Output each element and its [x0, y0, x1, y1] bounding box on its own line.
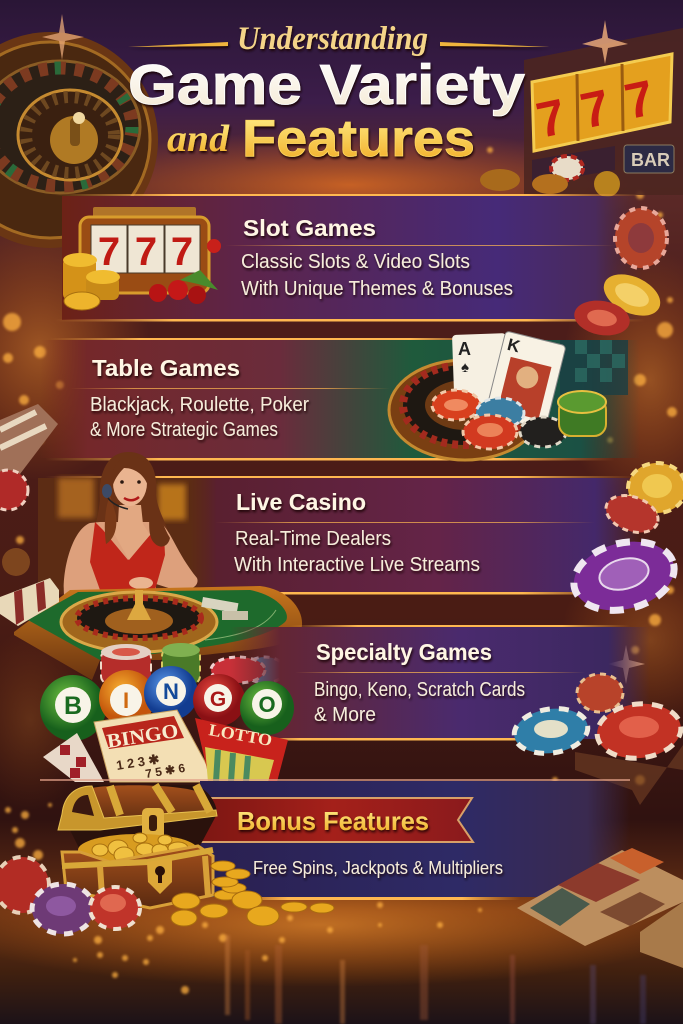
- heading: Specialty Games: [316, 639, 492, 665]
- icon: chips right lower: [511, 674, 683, 805]
- icon: chip stacks: [101, 643, 285, 684]
- title: Game Variety: [128, 53, 525, 117]
- icon: roulette, cards and chips: A: [458, 339, 471, 359]
- text block: With Interactive Live Streams: [234, 554, 480, 576]
- text block: Bingo, Keno, Scratch Cards: [314, 679, 525, 701]
- icon: bingo balls: N: [163, 679, 179, 704]
- icon: bingo balls: B: [64, 692, 82, 720]
- icon: slot machine top right: [480, 28, 683, 197]
- icon: roulette wheel top left: [0, 32, 158, 248]
- icon: dice card: [43, 733, 104, 782]
- heading ribbon: [192, 798, 473, 842]
- icon: slot machine 777: 7: [98, 230, 120, 274]
- icon: roulette, cards and chips: ♠: [461, 359, 469, 376]
- icon: checkered mat: [517, 848, 683, 968]
- text block: & More Strategic Games: [90, 419, 278, 441]
- panel: specialty games: [230, 625, 650, 740]
- heading: Table Games: [92, 355, 240, 381]
- panel: live casino: [38, 476, 640, 594]
- icon: lotto ticket: [195, 718, 288, 782]
- icon: chips right middle: [567, 463, 683, 620]
- icon: bingo card: 1 2 3 ✱: [115, 751, 160, 773]
- title: Features: [242, 110, 475, 168]
- icon: gold coins: [171, 861, 334, 926]
- icon: slot machine 777: 7: [135, 230, 157, 274]
- icon: roulette, cards and chips: [389, 331, 606, 460]
- icon: floating chips right top: [571, 208, 667, 340]
- text block: Blackjack, Roulette, Poker: [90, 394, 309, 416]
- title: and: [167, 118, 230, 160]
- icon: slot machine 777: [80, 207, 221, 293]
- title: Understanding: [237, 21, 428, 57]
- icon: coins and cherries: [63, 253, 218, 310]
- icon: bingo card: 7 5 ✱ 6: [144, 761, 186, 781]
- heading ribbon: Bonus Features: [237, 806, 429, 836]
- panel: table games: [40, 331, 640, 460]
- panel: slot games: [55, 194, 645, 322]
- text block: Classic Slots & Video Slots: [241, 251, 470, 273]
- icon: bingo balls: I: [123, 688, 129, 713]
- text block: Real-Time Dealers: [235, 528, 391, 550]
- text block: Free Spins, Jackpots & Multipliers: [253, 858, 503, 878]
- icon: bingo card: [94, 710, 216, 782]
- icon: slot machine top right: BAR: [631, 150, 670, 170]
- heading: Live Casino: [236, 489, 366, 515]
- icon: bingo balls: O: [258, 692, 276, 717]
- icon: roulette table: [0, 578, 302, 680]
- icon: bingo balls: [40, 666, 294, 741]
- icon: treasure chest: [58, 785, 217, 908]
- icon: lotto ticket: LOTTO: [207, 720, 274, 750]
- icon: sparkles: [42, 14, 645, 684]
- icon: roulette, cards and chips: K: [505, 335, 523, 357]
- heading: Slot Games: [243, 215, 376, 241]
- icon: bingo card: BINGO: [105, 720, 180, 753]
- icon: slot machine 777: 7: [171, 230, 193, 274]
- icon: bingo balls: G: [210, 688, 226, 711]
- icon: slot machine top right: 777: [532, 69, 659, 149]
- icon: chips bottom left: [0, 857, 140, 934]
- text block: & More: [314, 704, 376, 726]
- text block: With Unique Themes & Bonuses: [241, 278, 513, 300]
- panel: bonus features: [40, 779, 630, 900]
- title: [128, 21, 550, 168]
- icon: live dealer: [64, 452, 198, 595]
- icon: side chips left: [0, 404, 58, 576]
